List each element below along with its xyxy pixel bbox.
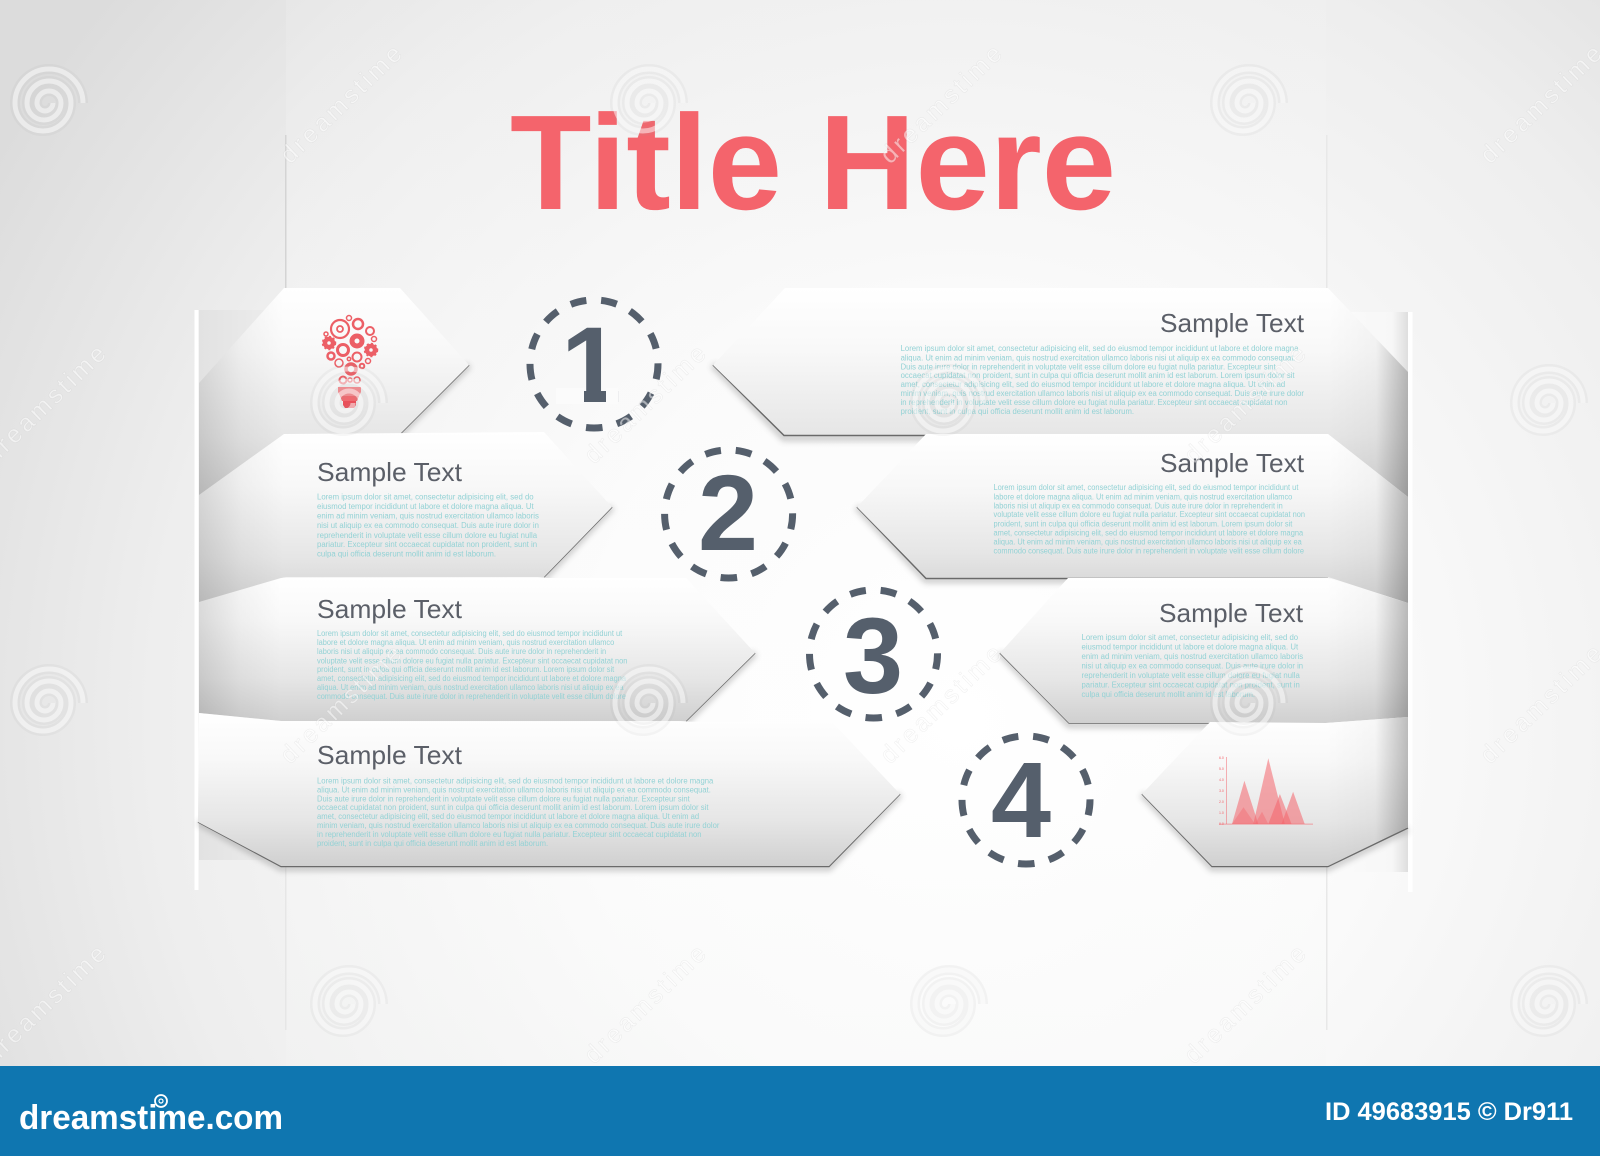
body text: proident, sunt in culpa qui officia deserunt mollit anim id est laborum. Lorem ipsum dolor sit	[317, 665, 615, 674]
icon: area chart: 0.0	[1219, 822, 1224, 826]
step 3 number badge: 3	[843, 595, 903, 716]
body text: commodo consequat. Duis aute irure dolor in reprehenderit in voluptate velit esse cillum dolore	[994, 546, 1305, 556]
body text: aliqua. Ut enim ad minim veniam, quis nostrud exercitation ullamco laboris nisi ut aliquip ex ea commodo consequat.	[317, 786, 711, 794]
icon: gear lightbulb	[323, 316, 377, 384]
body text: nisi ut aliquip ex ea commodo consequat. Duis aute irure dolor in	[317, 521, 539, 530]
panel: left 4	[198, 713, 900, 868]
watermark overlay: dreamstime	[1179, 338, 1314, 469]
body text: proident, sunt in culpa qui officia deserunt mollit anim id est laborum. Lorem ipsum dolor sit	[994, 520, 1293, 528]
body text: laboris nisi ut aliquip ex ea commodo consequat. Duis aute irure dolor in reprehenderit in	[994, 502, 1283, 510]
body text	[994, 483, 1305, 556]
title: Title Here	[510, 87, 1116, 238]
body text: Lorem ipsum dolor sit amet, consectetur adipisicing elit, sed do eiusmod tempor incididunt ut	[994, 483, 1299, 492]
body text: minim veniam, quis nostrud exercitation ullamco laboris nisi ut aliquip ex ea commodo consequat. Duis aute irure dolor	[901, 389, 1304, 398]
step 3 number badge	[802, 582, 945, 726]
body text: amet, consectetur adipisicing elit, sed do eiusmod tempor incididunt ut labore et dolore magna	[317, 674, 627, 683]
panel: right 4 with area chart icon	[1142, 717, 1408, 868]
body text: amet, consectetur adipisicing elit, sed do eiusmod tempor incididunt ut labore et dolore magna aliqua. Ut enim ad	[317, 812, 699, 821]
body text: Duis aute irure dolor in reprehenderit in voluptate velit esse cillum dolore eu fugiat nulla pariatur. Excepteur sint	[901, 362, 1276, 372]
body text: amet, consectetur adipisicing elit, sed do eiusmod tempor incididunt ut labore et dolore magna aliqua. Ut enim ad	[901, 380, 1285, 389]
body text	[317, 492, 539, 558]
step 2 number badge	[657, 442, 800, 586]
body text: Lorem ipsum dolor sit amet, consectetur adipisicing elit, sed do	[1082, 633, 1299, 642]
watermark overlay: dreamstime	[875, 38, 1010, 169]
watermark overlay: dreamstime	[579, 938, 714, 1069]
body text: commodo consequat. Duis aute irure dolor in reprehenderit in voluptate velit esse cillum dolore	[317, 692, 627, 701]
body text: culpa qui officia deserunt mollit anim id est laborum.	[1082, 690, 1255, 699]
step 4 number badge: 4	[991, 739, 1051, 860]
watermark overlay: dreamstime	[275, 638, 410, 769]
footer logo: dreamstime.com	[19, 1099, 283, 1137]
body text: Lorem ipsum dolor sit amet, consectetur adipisicing elit, sed do eiusmod tempor incididunt ut labore et dolore magna	[901, 344, 1299, 353]
body text: aliqua. Ut enim ad minim veniam, quis nostrud exercitation ullamco laboris nisi ut aliquip ex ea commodo consequat.	[901, 354, 1296, 362]
body text: pariatur. Excepteur sint occaecat cupidatat non proident, sunt in	[317, 540, 537, 549]
heading: Sample Text	[317, 457, 463, 487]
centre paper sheet	[285, 0, 1328, 1067]
icon: area chart: 6.0	[1219, 756, 1224, 760]
body text: nisi ut aliquip ex ea commodo consequat. Duis aute irure dolor in	[1082, 662, 1303, 670]
body text: occaecat cupidatat non proident, sunt in culpa qui officia deserunt mollit anim id est laborum. Lorem ipsum dolor sit	[317, 803, 709, 812]
body text: culpa qui officia deserunt mollit anim id est laborum.	[317, 550, 496, 558]
body text: in reprehenderit in voluptate velit esse cillum dolore eu fugiat nulla pariatur. Excepteur sint occaecat cupidatat non	[317, 830, 702, 839]
body text: amet, consectetur adipisicing elit, sed do eiusmod tempor incididunt ut labore et dolore magna	[994, 528, 1304, 538]
icon: area chart: 1.0	[1219, 811, 1224, 815]
icon: area chart: 5.0	[1219, 767, 1224, 771]
panel: right 3	[1000, 578, 1408, 725]
panel: left 2	[199, 432, 612, 610]
body text: voluptate velit esse cillum dolore eu fugiat nulla pariatur. Excepteur sint occaecat cupidatat non	[317, 656, 627, 666]
body text: enim ad minim veniam, quis nostrud exercitation ullamco laboris	[1082, 652, 1303, 661]
body text: minim veniam, quis nostrud exercitation ullamco laboris nisi ut aliquip ex ea commodo consequat. Duis aute irure dolor	[317, 821, 720, 830]
body text: pariatur. Excepteur sint occaecat cupidatat non proident, sunt in	[1082, 680, 1300, 690]
body text: reprehenderit in voluptate velit esse cillum dolore eu fugiat nulla	[317, 531, 538, 540]
icon: area chart: 3.0	[1219, 789, 1224, 793]
watermark overlay: dreamstime	[275, 38, 410, 169]
watermark overlay: dreamstime	[579, 338, 714, 469]
icon: area chart: 4.0	[1219, 778, 1224, 782]
panel: right 2	[857, 434, 1408, 603]
heading: Sample Text	[1160, 448, 1305, 478]
body text: reprehenderit in voluptate velit esse cillum dolore eu fugiat nulla	[1082, 671, 1300, 680]
side bands behind panels	[194, 310, 1412, 892]
icon: area chart	[1219, 756, 1313, 826]
heading: Sample Text	[1160, 308, 1305, 338]
footer bar	[0, 1066, 1600, 1156]
panel: left 1 with lightbulb icon	[199, 288, 469, 500]
body text	[317, 629, 627, 701]
body text: voluptate velit esse cillum dolore eu fugiat nulla pariatur. Excepteur sint occaecat cupidatat non	[994, 510, 1305, 519]
icon: area chart: 2.0	[1219, 800, 1224, 804]
panel: left 3	[199, 578, 755, 722]
body text: aliqua. Ut enim ad minim veniam, quis nostrud exercitation ullamco laboris nisi ut aliquip ex ea	[317, 683, 624, 692]
body text: laboris nisi ut aliquip ex ea commodo consequat. Duis aute irure dolor in reprehenderit in	[317, 647, 606, 656]
step 1 number badge	[522, 292, 666, 436]
heading: Sample Text	[1159, 598, 1304, 628]
body text: eiusmod tempor incididunt ut labore et dolore magna aliqua. Ut	[1082, 642, 1299, 652]
image id credit: ID 49683915 © Dr911	[1325, 1098, 1573, 1126]
body text: proident, sunt in culpa qui officia deserunt mollit anim id est laborum.	[901, 407, 1134, 416]
step 1 number badge: 1	[561, 304, 621, 425]
body text: labore et dolore magna aliqua. Ut enim ad minim veniam, quis nostrud exercitation ullamco	[994, 492, 1293, 502]
body text: proident, sunt in culpa qui officia deserunt mollit anim id est laborum.	[317, 839, 548, 848]
heading: Sample Text	[317, 594, 463, 624]
body text: Lorem ipsum dolor sit amet, consectetur adipisicing elit, sed do eiusmod tempor incididunt ut labore et dolore magna	[317, 776, 714, 786]
heading: Sample Text	[317, 740, 463, 770]
body text	[901, 344, 1304, 416]
panel: right 1	[713, 288, 1408, 497]
body text: in reprehenderit in voluptate velit esse cillum dolore eu fugiat nulla pariatur. Excepteur sint occaecat cupidatat non	[901, 398, 1288, 407]
watermark overlay: dreamstime	[1179, 938, 1314, 1069]
body text: aliqua. Ut enim ad minim veniam, quis nostrud exercitation ullamco laboris nisi ut aliquip ex ea	[994, 538, 1302, 546]
body text	[1082, 633, 1303, 699]
body text: labore et dolore magna aliqua. Ut enim ad minim veniam, quis nostrud exercitation ullamco	[317, 638, 615, 647]
step 2 number badge: 2	[698, 452, 758, 573]
body text: eiusmod tempor incididunt ut labore et dolore magna aliqua. Ut	[317, 502, 534, 511]
body text: enim ad minim veniam, quis nostrud exercitation ullamco laboris	[317, 512, 539, 520]
body text: Lorem ipsum dolor sit amet, consectetur adipisicing elit, sed do	[317, 492, 534, 502]
step 4 number badge	[954, 728, 1098, 872]
body text: Duis aute irure dolor in reprehenderit in voluptate velit esse cillum dolore eu fugiat nulla pariatur. Excepteur sint	[317, 794, 690, 804]
body text: occaecat cupidatat non proident, sunt in culpa qui officia deserunt mollit anim id est laborum. Lorem ipsum dolor sit	[901, 371, 1295, 380]
body text	[317, 776, 720, 848]
body text: Lorem ipsum dolor sit amet, consectetur adipisicing elit, sed do eiusmod tempor incididunt ut	[317, 629, 623, 638]
watermark overlay: dreamstime	[875, 638, 1010, 769]
